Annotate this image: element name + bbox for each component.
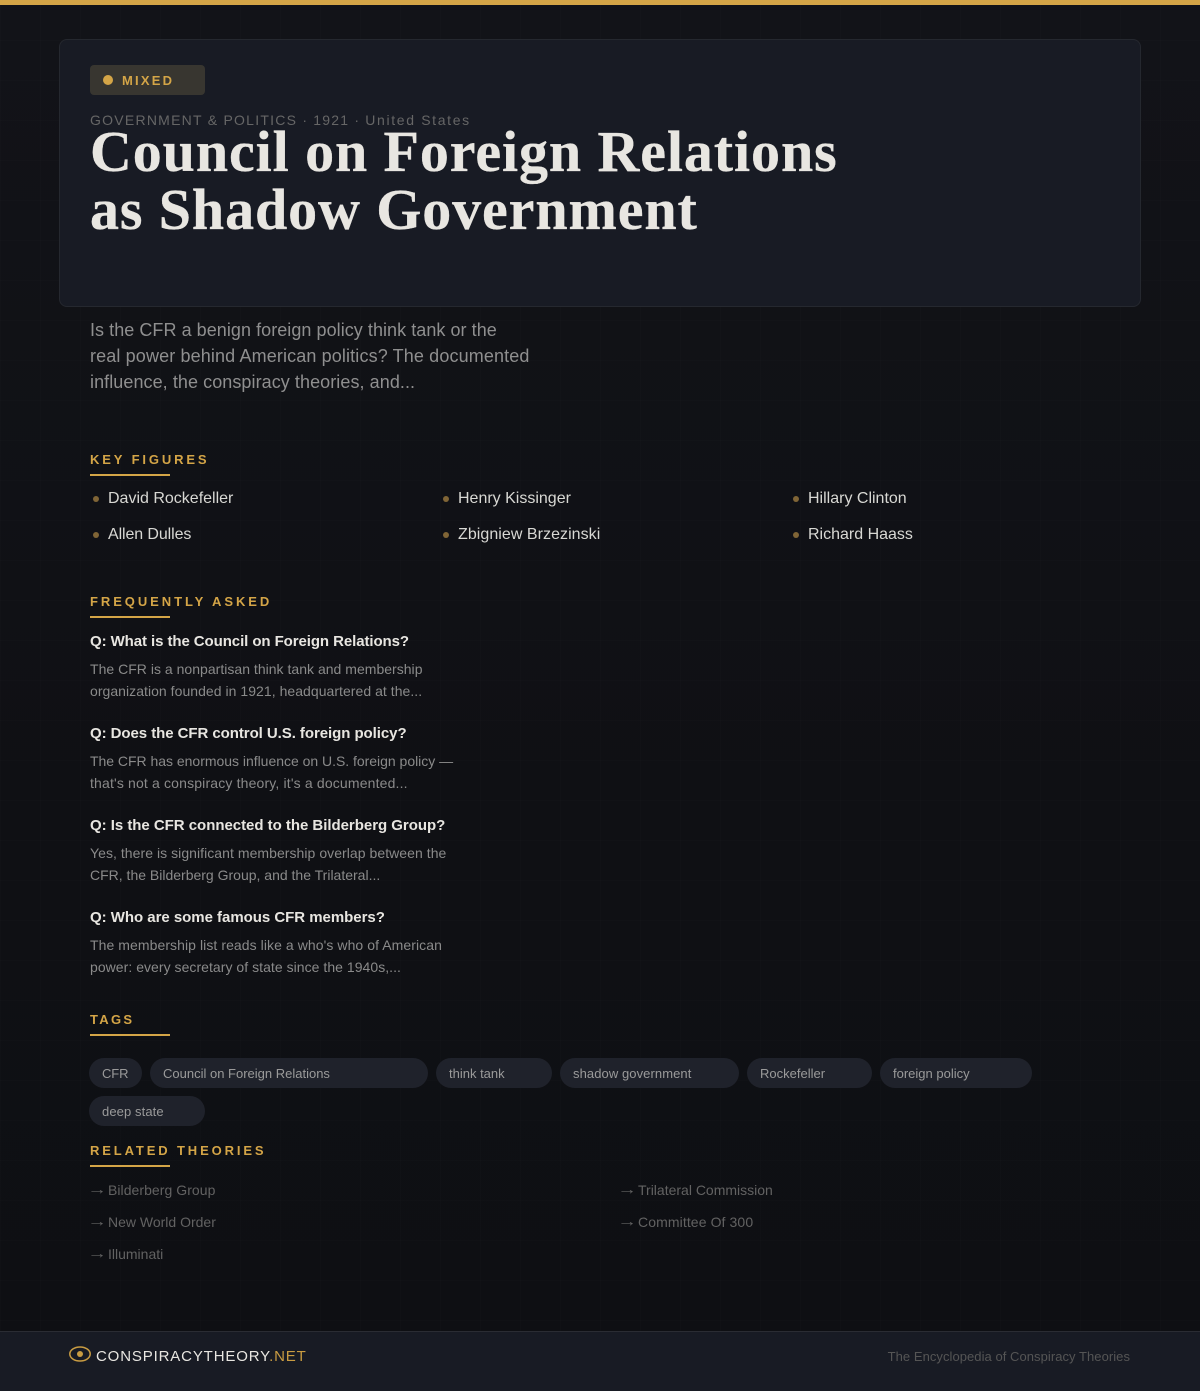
faq 1 [90,633,422,699]
key figures list: David Rockefeller [108,490,233,507]
related theories list: Bilderberg Group [108,1182,215,1198]
key figures list: Hillary Clinton [808,490,907,507]
key figures list [93,490,913,543]
title: Council on Foreign Relations [90,119,838,184]
heading: key figures: KEY FIGURES [90,452,209,467]
badge: mixed [90,65,205,95]
related theories list: → [617,1181,637,1197]
faq 3: CFR, the Bilderberg Group, and the Trilateral... [90,867,380,883]
tags: shadow government [573,1066,691,1081]
tags: foreign policy [893,1066,970,1081]
heading: frequently asked: FREQUENTLY ASKED [90,594,272,609]
icon: eye [69,1346,91,1362]
intro text: influence, the conspiracy theories, and... [90,372,415,392]
faq 2 [90,725,454,791]
tagline: The Encyclopedia of Conspiracy Theories [888,1349,1130,1364]
category line: GOVERNMENT & POLITICS · 1921 · United States [90,112,471,128]
related theories list: Trilateral Commission [638,1182,773,1198]
tags: CFR [102,1066,128,1081]
faq 2: The CFR has enormous influence on U.S. foreign policy — [90,753,453,769]
panel: header [59,39,1141,307]
related theories list: New World Order [108,1214,216,1230]
key figures list: Allen Dulles [108,526,191,543]
tags [89,1058,1032,1126]
faq 4 [90,909,442,975]
tags: deep state [102,1104,164,1119]
faq 4: power: every secretary of state since the 1940s,... [90,959,401,975]
tags: Council on Foreign Relations [163,1066,330,1081]
related theories list: Illuminati [108,1246,163,1262]
faq 4: The membership list reads like a who's who of American [90,937,442,953]
heading: tags: TAGS [90,1012,134,1027]
tags: Rockefeller [760,1066,825,1081]
related theories list: → [87,1245,107,1261]
faq 1: The CFR is a nonpartisan think tank and membership [90,661,422,677]
faq 3: Yes, there is significant membership overlap between the [90,845,446,861]
faq 1: Q: What is the Council on Foreign Relations? [90,633,409,650]
badge: mixed: MIXED [122,73,174,88]
top accent bar [0,0,1200,5]
logo text: CONSPIRACYTHEORY.NET [96,1348,307,1365]
related theories list: → [617,1213,637,1229]
faq 2: Q: Does the CFR control U.S. foreign policy? [90,725,407,742]
title [90,119,838,242]
faq 4: Q: Who are some famous CFR members? [90,909,385,926]
intro text [90,320,530,392]
key figures list: Richard Haass [808,526,913,543]
tags: think tank [449,1066,505,1081]
intro text: Is the CFR a benign foreign policy think tank or the [90,320,497,340]
heading: related theories: RELATED THEORIES [90,1143,266,1158]
faq 3: Q: Is the CFR connected to the Bilderberg Group? [90,817,445,834]
intro text: real power behind American politics? The documented [90,346,530,366]
related theories list [87,1181,773,1262]
faq 3 [90,817,446,883]
key figures list: Henry Kissinger [458,490,571,507]
related theories list: → [87,1213,107,1229]
related theories list: Committee Of 300 [638,1214,753,1230]
key figures list: Zbigniew Brzezinski [458,526,600,543]
faq 2: that's not a conspiracy theory, it's a documented... [90,775,408,791]
footer [0,1331,1200,1391]
related theories list: → [87,1181,107,1197]
title: as Shadow Government [90,177,698,242]
faq 1: organization founded in 1921, headquartered at the... [90,683,422,699]
